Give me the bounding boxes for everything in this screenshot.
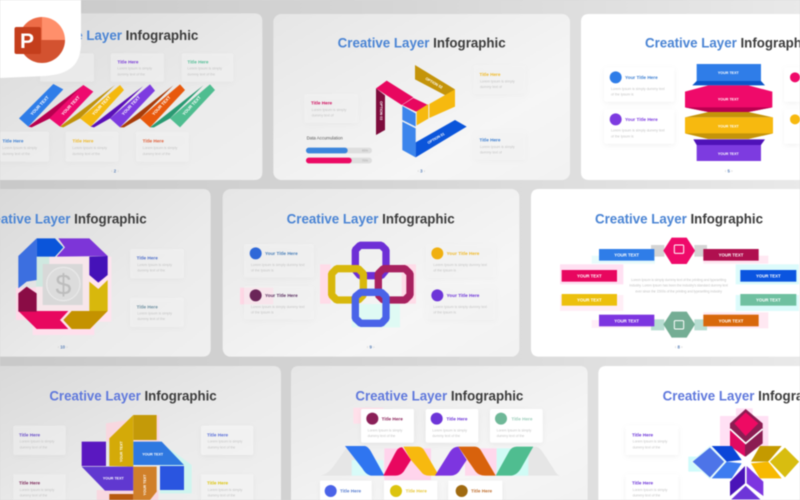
right text cards	[426, 244, 496, 319]
text cards: Title Here	[207, 481, 229, 486]
page number: ‹ 8 ›	[675, 345, 683, 350]
center paragraph: ever since the 1500s of the printing and typesetting industry	[635, 289, 722, 293]
slide title: Creative Layer Infographic	[30, 27, 199, 43]
top text cards: Title Here	[446, 416, 468, 421]
text card: option 3	[304, 94, 358, 123]
slide title: Creative Layer Infographic	[287, 210, 455, 226]
text card: option 1: dummy text of	[480, 150, 502, 154]
text card: option 3: Lorem Ipsum is simply	[312, 108, 347, 112]
bottom text cards: Title Here	[340, 489, 362, 494]
text cards	[13, 426, 253, 500]
right text cards: Your Title Here	[447, 293, 480, 298]
text card: option 1	[473, 131, 526, 159]
diagonal ribbons: YOUR TEXT	[29, 95, 50, 116]
center paragraph: Lorem Ipsum is simply dummy text of the printing and typesetting	[631, 278, 726, 282]
data accumulation bars: Data Accumulation	[307, 135, 343, 140]
left text cards: Your Title Here	[625, 75, 658, 80]
pinwheel shape	[82, 415, 192, 500]
dollar octagon	[16, 238, 111, 335]
data accumulation bars: 65%	[362, 149, 368, 153]
pastel backing	[560, 256, 799, 328]
text card: option 1: Title Here	[479, 137, 501, 142]
left text cards: Lorem Ipsum is simply dummy text	[251, 305, 305, 309]
panel: hexagon bands slide	[531, 189, 800, 357]
stacked layers	[685, 64, 773, 161]
right text cards: of the Ipsum is	[433, 310, 456, 314]
bottom text cards: Lorem Ipsum is simply	[72, 146, 107, 150]
text cards: dummy text of the	[137, 269, 165, 273]
left text cards: of the Ipsum is	[611, 134, 634, 138]
interlocked rings	[320, 245, 416, 327]
bottom text cards: Title Here	[2, 139, 24, 144]
panel: pinwheel slide	[0, 366, 281, 500]
diagonal ribbons: YOUR TEXT	[91, 95, 112, 116]
page number: ‹ 9 ›	[367, 345, 375, 350]
text bands: YOUR TEXT	[577, 297, 602, 302]
top text cards: dummy text of the	[117, 72, 145, 76]
left text cards: Your Title Here	[625, 117, 658, 122]
diagonal ribbons: YOUR TEXT	[151, 95, 172, 116]
dollar octagon: $	[55, 269, 71, 301]
top text cards: Lorem Ipsum is simply	[187, 67, 222, 71]
powerpoint badge	[0, 0, 81, 78]
slide title: Creative Layer Infographic	[338, 34, 506, 50]
text cards: Lorem Ipsum is simply	[20, 440, 55, 444]
text cards: dummy text of the	[633, 445, 660, 449]
diagonal ribbons: YOUR TEXT	[60, 95, 81, 116]
text cards: Lorem Ipsum is simply	[633, 440, 668, 444]
text card: option 2: dummy text of	[480, 85, 502, 89]
bottom text cards	[320, 481, 502, 500]
top text cards: Lorem Ipsum is simply	[117, 67, 152, 71]
stacked layers: YOUR TEXT	[718, 125, 740, 129]
left text cards: Your Title Here	[265, 251, 298, 256]
text cards: Title Here	[632, 432, 654, 437]
text cards: Title Here	[19, 432, 41, 437]
top text cards: Title Here	[187, 59, 209, 64]
isometric shape: OPTION 03	[379, 101, 383, 120]
left text cards: Lorem Ipsum is simply dummy text	[611, 129, 665, 133]
text cards: Lorem Ipsum is simply	[137, 312, 172, 316]
left text cards	[604, 67, 674, 144]
stacked layers: YOUR TEXT	[718, 71, 740, 75]
panel: cross of cubes slide	[598, 366, 800, 500]
bottom text cards: dummy text of the	[2, 152, 30, 156]
text cards: dummy text of the	[137, 317, 165, 321]
data accumulation bars	[306, 135, 372, 163]
text cards: Lorem Ipsum is simply	[137, 263, 172, 267]
top text cards: dummy text of the	[497, 434, 524, 438]
left text cards: Your Title Here	[265, 293, 298, 298]
panel: wave ribbon slide	[291, 366, 588, 500]
wave ribbon	[320, 446, 560, 480]
bottom text cards: Lorem Ipsum is simply	[2, 146, 37, 150]
text card: option 2: Title Here	[479, 72, 501, 77]
panel: stacked layers slide	[581, 14, 800, 180]
text cards: Title Here	[137, 304, 158, 309]
bottom text cards: dummy text of the	[72, 152, 100, 156]
page number: ‹ 2 ›	[111, 169, 119, 174]
bottom text cards: Lorem Ipsum is simply	[143, 146, 178, 150]
top text cards: dummy text of the	[368, 434, 395, 438]
bottom hexagon	[651, 312, 707, 338]
diagonal ribbons: YOUR TEXT	[181, 95, 202, 116]
text bands: YOUR TEXT	[614, 253, 639, 258]
isometric shape: OPTION 02	[425, 77, 443, 90]
bottom text cards: Title Here	[406, 489, 427, 494]
top text cards: Lorem Ipsum is simply	[368, 428, 403, 432]
left text cards: of the Ipsum is	[251, 310, 274, 314]
text cards	[626, 426, 678, 500]
stacked layers: YOUR TEXT	[718, 98, 740, 102]
center paragraph	[629, 278, 728, 293]
text cards: dummy text of the	[633, 494, 660, 498]
text cards: Title Here	[137, 256, 158, 261]
diagonal ribbons	[19, 84, 215, 127]
panel: interlocked rings slide	[223, 189, 519, 357]
pinwheel shape: YOUR TEXT	[143, 474, 147, 495]
bottom text cards: Title Here	[471, 489, 493, 494]
bottom text cards	[0, 132, 189, 162]
text bands: YOUR TEXT	[719, 253, 744, 258]
slide title: Creative Layer Infographic	[595, 210, 763, 226]
stacked layers: YOUR TEXT	[718, 152, 740, 156]
top text cards: Title Here	[511, 416, 533, 421]
text card: option 3: dummy text of	[312, 113, 334, 117]
top text cards: dummy text of the	[187, 72, 215, 76]
panel: diagonal ribbons slide	[0, 13, 262, 180]
isometric shape	[376, 65, 467, 157]
bottom text cards: Title Here	[143, 139, 164, 144]
text bands: YOUR TEXT	[719, 318, 744, 323]
isometric shape: OPTION 01	[427, 132, 445, 145]
text cards: Lorem Ipsum is simply	[208, 440, 243, 444]
left text cards	[240, 244, 314, 319]
text card: option 2: Lorem Ipsum is simply	[480, 80, 515, 84]
center paragraph: industry. Lorem Ipsum has been the industry's standard dummy text	[629, 284, 728, 288]
page number: ‹ 3 ›	[417, 169, 426, 174]
text cards: dummy text of the	[20, 494, 47, 498]
top text cards	[353, 408, 543, 443]
slide title: Creative Layer Infographic	[355, 388, 524, 404]
text bands: YOUR TEXT	[614, 318, 639, 323]
pinwheel shape: YOUR TEXT	[142, 452, 164, 456]
right text cards: of the Ipsum is	[433, 268, 456, 272]
data accumulation bars: 70%	[362, 159, 368, 163]
left text cards: Lorem Ipsum is simply dummy text	[611, 87, 665, 91]
left text cards: of the Ipsum is	[611, 92, 634, 96]
text cards: Lorem Ipsum is simply	[20, 488, 55, 492]
page number: ‹ 10 ›	[58, 345, 68, 350]
slide title: Creative Layer Infographic	[49, 388, 217, 404]
cube cross	[688, 408, 800, 500]
diagonal ribbons: YOUR TEXT	[121, 95, 141, 116]
page number: ‹ 5 ›	[725, 168, 733, 173]
bottom text cards: Title Here	[72, 139, 94, 144]
text card: option 3: Title Here	[311, 101, 333, 106]
text bands: YOUR TEXT	[756, 297, 781, 302]
text cards: Title Here	[632, 481, 654, 486]
top text cards: Lorem Ipsum is simply	[497, 428, 532, 432]
panel: dollar octagon slide	[0, 189, 211, 357]
text cards: Lorem Ipsum is simply	[633, 488, 668, 492]
top text cards	[40, 53, 233, 82]
text cards	[130, 249, 184, 327]
left text cards: of the Ipsum is	[251, 268, 274, 272]
text cards: Title Here	[19, 481, 41, 486]
right text cards: Lorem Ipsum is simply dummy text	[433, 305, 487, 309]
icon: powerpoint logo: P	[20, 30, 34, 53]
text card: option 1: Lorem Ipsum is simply	[480, 145, 515, 149]
text bands: YOUR TEXT	[756, 273, 781, 278]
top text cards: Lorem Ipsum is simply	[432, 428, 467, 432]
text cards: Lorem Ipsum is simply	[208, 488, 243, 492]
text bands	[562, 249, 796, 326]
top text cards: Title Here	[117, 59, 139, 64]
bottom text cards: dummy text of the	[143, 152, 170, 156]
right text cards	[784, 67, 800, 144]
left text cards: Lorem Ipsum is simply dummy text	[251, 263, 305, 267]
top text cards: Title Here	[382, 416, 403, 421]
text cards: dummy text of the	[208, 445, 235, 449]
panel: isometric options slide	[273, 14, 570, 180]
right text cards: Lorem Ipsum is simply dummy text	[433, 263, 487, 267]
text cards: dummy text of the	[20, 445, 47, 449]
text bands: YOUR TEXT	[577, 273, 602, 278]
pinwheel shape: YOUR TEXT	[119, 440, 123, 462]
pinwheel shape: YOUR TEXT	[103, 476, 125, 480]
right text cards: Your Title Here	[447, 251, 480, 256]
top text cards: dummy text of the	[432, 434, 460, 438]
text cards: Title Here	[207, 432, 229, 437]
text cards: dummy text of the	[208, 494, 235, 498]
text card: option 2	[473, 65, 526, 94]
top hexagon	[651, 238, 707, 264]
